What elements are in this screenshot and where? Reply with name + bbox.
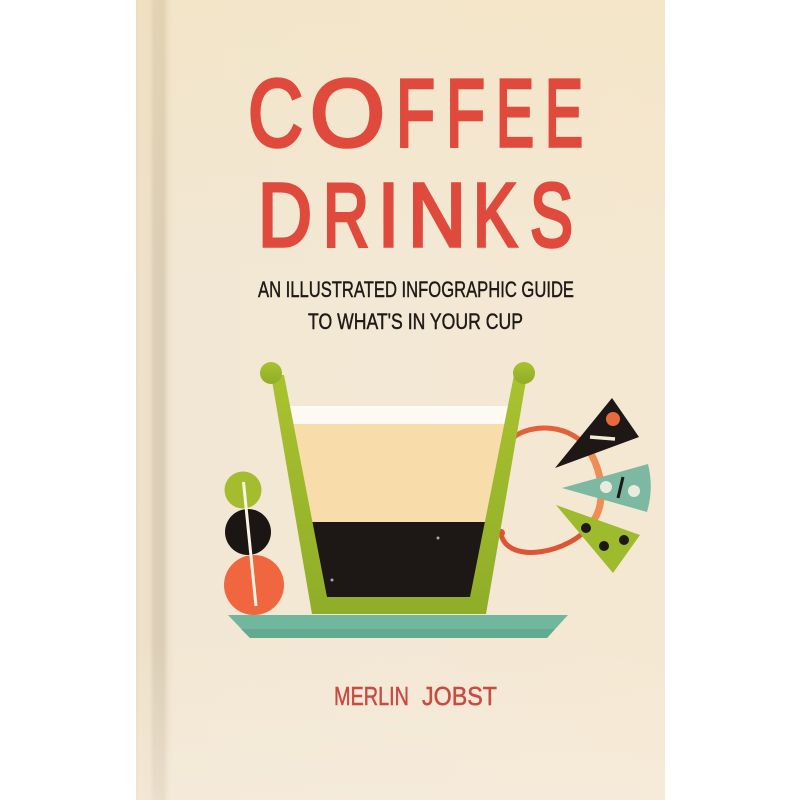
- milk layer: [292, 424, 505, 522]
- charm: green triangle: [556, 505, 640, 573]
- title line: COFFEE: F: [446, 60, 485, 167]
- title line: COFFEE: C: [248, 60, 303, 167]
- title line: DRINKS: I: [378, 166, 399, 266]
- title line: COFFEE: E: [496, 60, 534, 167]
- cover background: [136, 0, 665, 800]
- title line: DRINKS: S: [530, 166, 573, 266]
- title line: COFFEE: E: [545, 60, 583, 167]
- glass outline: [260, 362, 535, 614]
- title line: DRINKS: R: [323, 166, 369, 266]
- title line: COFFEE: F: [396, 60, 435, 167]
- skewer with olives: [224, 472, 284, 615]
- charm: teal triangle: [562, 464, 651, 512]
- subtitle: [258, 277, 574, 334]
- foam layer: [288, 406, 509, 424]
- subtitle line one: AN ILLUSTRATED INFOGRAPHIC GUIDE: [258, 277, 574, 302]
- subtitle line two: TO WHAT'S IN YOUR CUP: [308, 309, 523, 334]
- title line: DRINKS: K: [473, 166, 517, 266]
- illustration: coffee glass on saucer: [224, 362, 651, 638]
- saucer: [228, 615, 568, 638]
- title line: DRINKS: D: [258, 166, 312, 266]
- author name: MERLIN: [334, 681, 409, 711]
- title line: COFFEE: O: [310, 60, 385, 167]
- coffee layer: [309, 522, 490, 598]
- handle: [497, 428, 601, 552]
- charm: black triangle: [555, 398, 639, 468]
- author name: JOBST: [422, 681, 497, 711]
- title line: DRINKS: N: [408, 166, 466, 266]
- title: [248, 60, 583, 266]
